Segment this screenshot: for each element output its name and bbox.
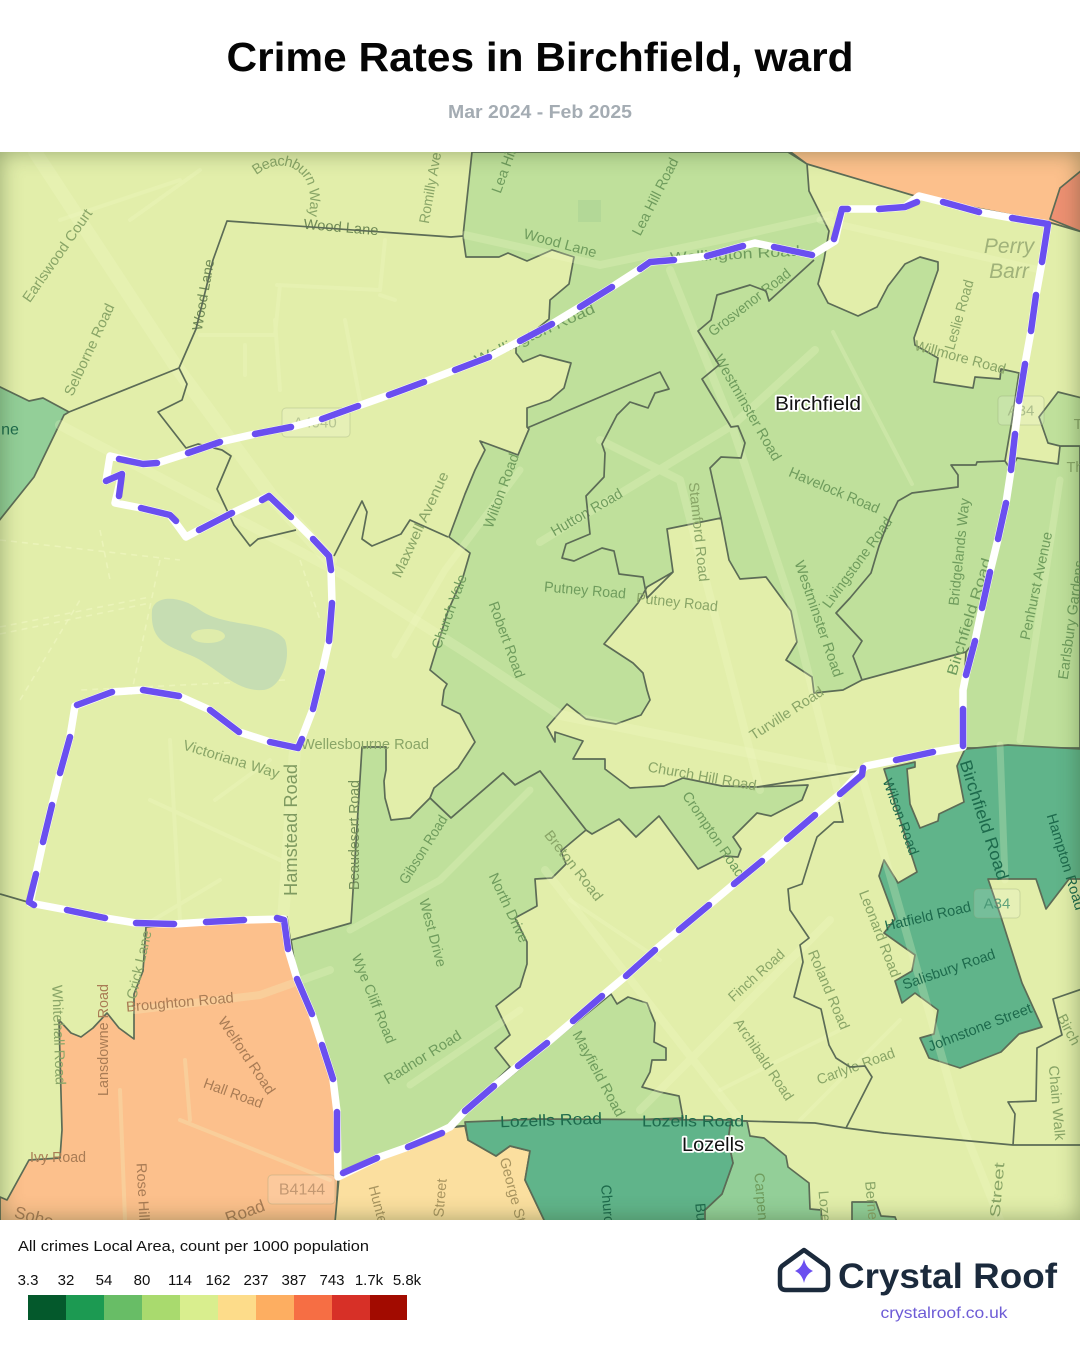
- area: low-crime dark green Birchfield Road: [879, 745, 1080, 1068]
- area: medium green Lozells east: [695, 1120, 822, 1222]
- road labels on light areas: Wellesbourne Road: [301, 737, 429, 753]
- road labels on light areas: Carlyle Road: [815, 1045, 897, 1089]
- place label: Birchfield: Birchfield: [775, 394, 861, 415]
- legend tick values: 1.7k: [355, 1272, 384, 1289]
- road labels on light areas: Beachburn Way: [252, 156, 320, 217]
- area: small medium green patch: [852, 1202, 897, 1222]
- area: Penhurst mid green strip: [963, 446, 1080, 748]
- legend tick values: [18, 1272, 422, 1289]
- road labels on mid green areas: Gibson Road: [397, 813, 451, 887]
- road labels on light areas: Victoriana Way: [181, 738, 282, 782]
- road labels on light areas: Archibald Road: [730, 1016, 796, 1104]
- road labels on mid green areas: Crompton Road: [678, 789, 748, 881]
- road labels on mid green areas: Bridgelands Way: [946, 497, 974, 607]
- road labels on orange and cream areas: Hunter: [365, 1184, 391, 1230]
- road labels on dark green areas: ne: [1, 422, 19, 438]
- road labels on light areas: Leonard Road: [855, 888, 903, 980]
- lake island: [191, 629, 225, 643]
- ward boundary: purple dashes: [29, 202, 1048, 1173]
- area: low-crime dark green Lozells: [465, 1119, 733, 1222]
- road labels on mid green areas: Penhurst Avenue: [1018, 531, 1056, 641]
- road labels on orange and cream areas: Street: [431, 1178, 451, 1218]
- road labels on orange and cream areas: George St: [496, 1156, 528, 1224]
- road labels on orange and cream areas: Ivy Road: [30, 1150, 86, 1166]
- road labels on dark green areas: Lozells Road: [500, 1111, 602, 1131]
- road labels on mid green areas: Livingstone Road: [820, 515, 896, 611]
- shield text: B4144: [279, 1182, 325, 1198]
- road labels on light areas: Church Hill Road: [646, 760, 758, 794]
- road labels on mid green areas: [348, 145, 1080, 1238]
- road labels on light areas: Breton Road: [541, 828, 605, 904]
- park paths: [0, 530, 320, 700]
- road labels on mid green areas: Lea Hill: [489, 145, 521, 195]
- place label: Perry Barr: Barr: [989, 260, 1030, 283]
- road labels on dark green areas: Church: [597, 1184, 617, 1232]
- road labels on light areas: Wood Lane: [190, 258, 218, 332]
- building block: [578, 200, 601, 222]
- road labels on mid green areas: West Drive: [415, 897, 449, 969]
- legend title: All crimes Local Area, count per 1000 population: [18, 1238, 369, 1255]
- legend tick values: 54: [96, 1272, 112, 1289]
- road labels on dark green areas: Johnstone Street: [926, 1001, 1034, 1055]
- road labels on mid green areas: North Drive: [485, 871, 531, 945]
- road labels on dark green areas: Wilson Road: [879, 777, 921, 857]
- road shields: [268, 396, 1044, 1204]
- legend tick values: 80: [134, 1272, 150, 1289]
- road labels on light areas: Romilly Ave: [417, 151, 445, 225]
- area: Gibson Road mid green: [291, 747, 586, 1177]
- area: cream south: [335, 1126, 545, 1222]
- crime-rate choropleth areas: [0, 150, 1080, 1222]
- road labels on dark green areas: Lozells Road: [642, 1114, 744, 1130]
- road labels on light areas: Beaudesert Road: [347, 780, 363, 890]
- road labels on light areas: Chain Walk: [1045, 1065, 1067, 1142]
- road labels on mid green areas: Mayfield Road: [569, 1028, 627, 1120]
- road labels on mid green areas: Havelock Road: [786, 465, 882, 517]
- ward boundary: white base line: [30, 196, 1048, 1177]
- legend tick values: 237: [243, 1272, 269, 1289]
- legend tick values: 32: [58, 1272, 74, 1289]
- subtitle: date range: Mar 2024 - Feb 2025: [448, 102, 632, 122]
- road labels on light areas: Turville Road: [747, 684, 827, 744]
- road labels on light areas: Roland Road: [804, 948, 852, 1032]
- road labels on mid green areas: Wye Cliff Road: [348, 952, 398, 1046]
- additional ward boundary lines: [0, 221, 1080, 1145]
- area: top-right red orange: [1050, 170, 1080, 232]
- road labels on light areas: Whitehall Road: [48, 985, 68, 1085]
- legend: [18, 1272, 422, 1320]
- road labels on mid green areas: Putney Road: [543, 579, 627, 603]
- road labels on light areas: Street: [988, 1162, 1008, 1218]
- road labels on light areas: Finch Road: [726, 947, 788, 1005]
- faint road network: [35, 152, 1060, 1220]
- road labels on mid green areas: Robert Road: [485, 600, 527, 680]
- road labels on mid green areas: Grosvenor Road: [706, 266, 794, 340]
- road labels on light areas: Lozel: [815, 1190, 833, 1226]
- road labels on orange and cream areas: Soho: [12, 1203, 56, 1231]
- legend tick values: 114: [168, 1272, 192, 1289]
- road labels on light areas: Willmore Road: [913, 338, 1007, 378]
- road labels on orange and cream areas: Welford Road: [214, 1014, 278, 1098]
- road labels on mid green areas: Wilton Road: [481, 452, 523, 530]
- road labels on orange and cream areas: Rose Hill: [132, 1163, 152, 1221]
- road labels on mid green areas: Wellington Road: [670, 244, 800, 266]
- legend tick values: 3.3: [18, 1272, 38, 1289]
- road labels on light areas: Maxwell Avenue: [389, 470, 453, 580]
- map background: [0, 152, 1080, 1220]
- road labels on light areas: [22, 153, 1080, 1220]
- road labels on orange and cream areas: [12, 984, 528, 1231]
- road labels on dark green areas: [1, 422, 1080, 1232]
- place label: Lozells: Lozells: [682, 1135, 744, 1156]
- road labels on mid green areas: Westminster Road: [791, 559, 845, 679]
- legend tick values: 5.8k: [393, 1272, 422, 1289]
- road labels on light areas: Stamford Road: [685, 481, 711, 583]
- road labels on dark green areas: Birchfield Road: [956, 758, 1012, 882]
- road labels on orange and cream areas: Road: [223, 1196, 267, 1228]
- road labels on light areas: Berner: [861, 1181, 881, 1226]
- legend tick values: 743: [319, 1272, 345, 1289]
- legend tick values: 387: [281, 1272, 307, 1289]
- area: central mid green: [430, 152, 1019, 869]
- road labels on mid green areas: Birchfield Road: [945, 556, 995, 678]
- road labels on light areas: Leslie Road: [942, 278, 978, 352]
- area: Mayfield Road mid green: [447, 994, 683, 1128]
- title: Crime Rates in Birchfield, ward: [226, 34, 854, 80]
- logo wordmark: Crystal Roof: [838, 1257, 1057, 1296]
- road labels on light areas: Hamstead Road: [281, 764, 301, 896]
- road labels on orange and cream areas: Broughton Road: [126, 990, 234, 1016]
- road labels on mid green areas: Wood Lane: [522, 227, 598, 261]
- road labels on orange and cream areas: Lansdowne Road: [96, 984, 112, 1096]
- road labels on mid green areas: Westminster Road: [710, 352, 784, 464]
- road labels on mid green areas: Lea Hill Road: [630, 156, 682, 238]
- road labels on light areas: Crick Lane: [124, 929, 156, 1001]
- road labels on mid green areas: Carpenter: [750, 1172, 772, 1238]
- road labels on dark green areas: Bu: [691, 1202, 709, 1222]
- shield text: [279, 402, 1034, 1198]
- road labels on light areas: Wood Lane: [303, 217, 379, 239]
- shield text: A34: [984, 896, 1010, 912]
- area: high-crime orange north: [788, 150, 1080, 232]
- road labels on orange and cream areas: Hall Road: [201, 1076, 265, 1112]
- place label: Perry Barr: Perry: [984, 235, 1036, 258]
- road labels on mid green areas: Church Vale: [429, 573, 471, 651]
- icon: house with star: [780, 1250, 828, 1290]
- place label: Perry Barr: [984, 238, 1035, 278]
- shield text: A34: [1008, 402, 1034, 420]
- road labels on light areas: Selborne Road: [62, 301, 118, 399]
- road labels on light areas: Earlswood Court: [20, 206, 96, 306]
- road labels on dark green areas: Hatfield Road: [883, 899, 973, 935]
- road labels on mid green areas: Hutton Road: [548, 486, 626, 540]
- legend tick values: 162: [205, 1272, 231, 1289]
- shield text: A4040: [293, 414, 337, 432]
- logo: Crystal Roof: [780, 1250, 1057, 1322]
- lake: [152, 599, 287, 690]
- road labels on light areas: Putney Road: [635, 591, 719, 615]
- area: north-east mid green pocket: [1039, 392, 1080, 446]
- road labels on mid green areas: Radnor Road: [381, 1028, 465, 1088]
- logo url: crystalroof.co.uk: [880, 1305, 1009, 1322]
- road labels on mid green areas: Wellington Road: [472, 301, 598, 369]
- area: high-crime orange south-west: [0, 917, 338, 1222]
- area: medium green west: [0, 386, 69, 522]
- path for curved Beachburn Way label: [254, 162, 314, 215]
- road labels on dark green areas: Salisbury Road: [901, 947, 997, 993]
- legend colour bar: [28, 1295, 407, 1320]
